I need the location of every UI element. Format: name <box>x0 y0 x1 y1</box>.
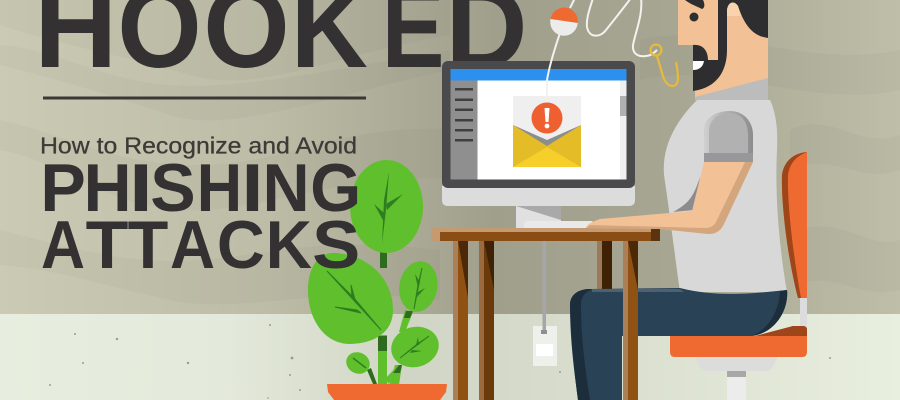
desk front legs <box>453 241 638 400</box>
heading: ATTACKS: A <box>170 207 215 283</box>
heading: PHISHING: H <box>197 150 242 226</box>
monitor stand <box>516 206 561 228</box>
browser title bar <box>450 69 626 80</box>
heading: ATTACKS: S <box>312 207 360 283</box>
arm <box>586 111 753 234</box>
heading: ATTACKS: T <box>86 207 128 283</box>
heading: PHISHING: N <box>263 150 310 226</box>
bobber <box>550 8 578 36</box>
eye and eyebrow <box>685 0 704 22</box>
plant <box>308 160 447 400</box>
heading: PHISHING: H <box>84 150 132 226</box>
chair back <box>782 152 807 298</box>
title: HOOKED <box>34 0 528 92</box>
heading: PHISHING <box>40 150 361 226</box>
heading: PHISHING: P <box>40 150 86 226</box>
desk top <box>431 228 660 241</box>
fishing line <box>547 0 657 96</box>
heading: ATTACKS: T <box>128 207 168 283</box>
chair <box>670 152 807 400</box>
leaf: large left <box>308 253 393 344</box>
heading: ATTACKS <box>41 207 360 283</box>
cable and wall outlet <box>533 241 557 366</box>
heading: PHISHING: I <box>242 150 263 226</box>
scrollbar <box>620 80 626 180</box>
chair seat <box>670 326 807 357</box>
heading: ATTACKS: C <box>217 207 265 283</box>
sleeve <box>704 111 753 162</box>
sidebar <box>450 80 478 180</box>
email envelope alert icon <box>513 96 581 167</box>
heading: PHISHING: I <box>129 150 153 226</box>
desk back legs <box>479 241 612 400</box>
person <box>431 0 787 400</box>
hair <box>716 0 768 38</box>
fish hook <box>650 44 678 86</box>
heading: ATTACKS: A <box>41 207 85 283</box>
heading: PHISHING: G <box>310 150 361 226</box>
chair connector <box>800 298 807 328</box>
mouth <box>693 61 704 70</box>
plant stems <box>367 250 413 385</box>
pants <box>570 288 787 400</box>
subtitle: How to Recognize and Avoid <box>40 132 357 158</box>
leaf: lower right <box>387 321 443 373</box>
leaf: top <box>350 160 423 253</box>
ear highlight <box>727 3 741 16</box>
torso <box>664 100 787 292</box>
alert badge <box>532 102 562 134</box>
chair base and post <box>696 357 778 371</box>
beard <box>693 0 727 91</box>
title divider line <box>43 96 366 100</box>
leaf: small <box>343 348 373 378</box>
neck and face skin <box>678 0 768 97</box>
keyboard <box>524 221 594 229</box>
plant pot <box>327 384 447 400</box>
heading: PHISHING: S <box>150 150 196 226</box>
monitor <box>442 61 635 206</box>
floor <box>0 314 900 400</box>
heading: ATTACKS: K <box>266 207 312 283</box>
leaf: upper right <box>395 258 442 315</box>
collar <box>695 76 768 100</box>
wall background <box>0 0 900 315</box>
